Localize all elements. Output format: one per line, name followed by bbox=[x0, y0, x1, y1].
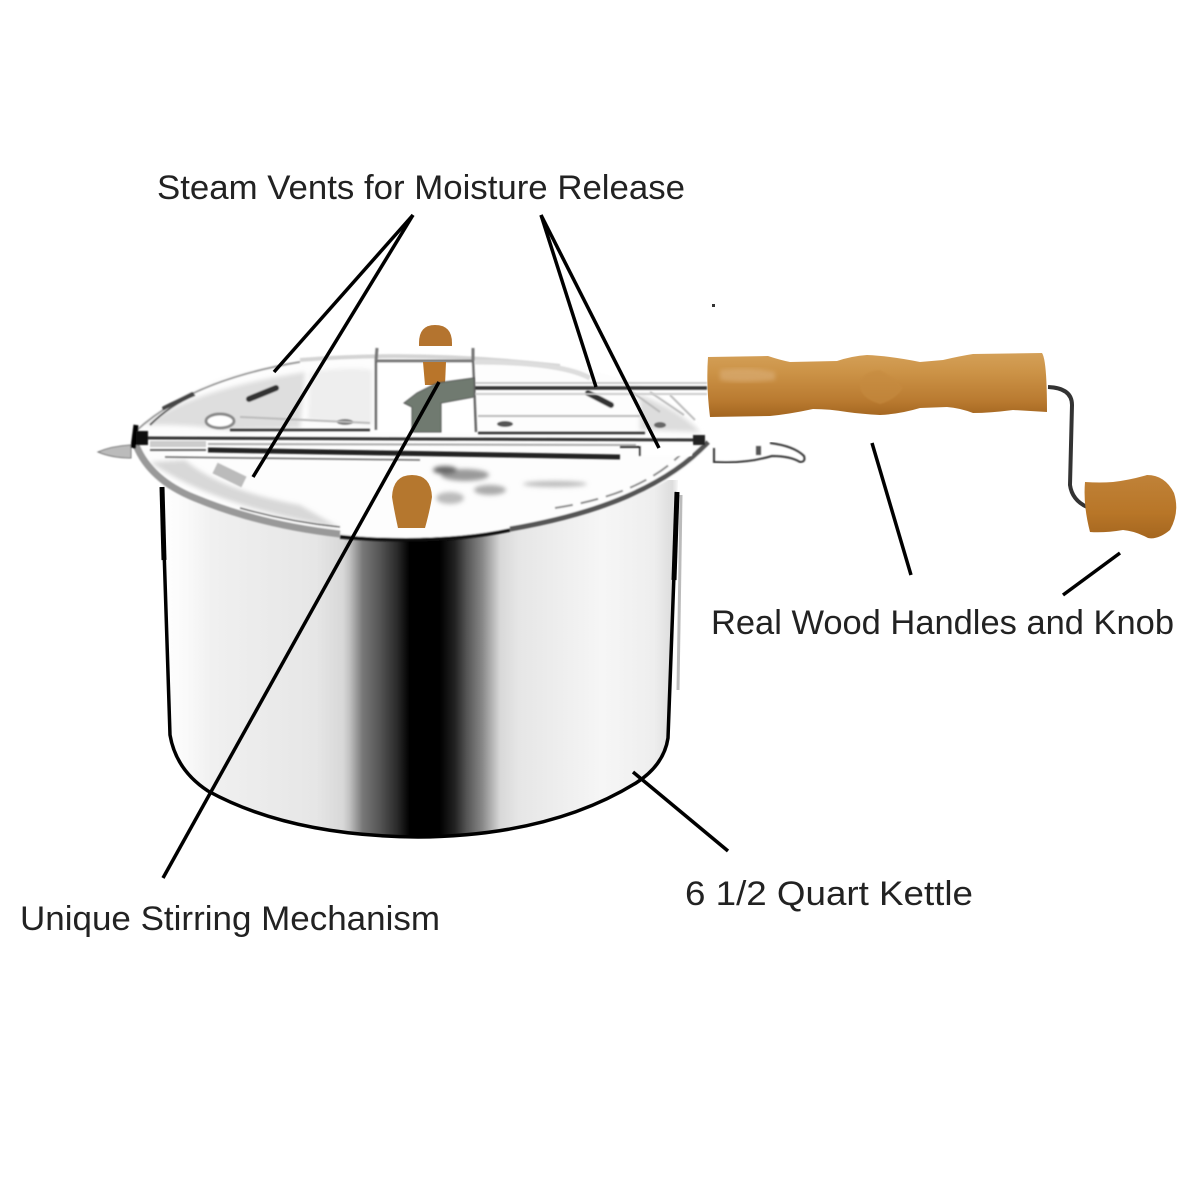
kettle lid bbox=[132, 355, 708, 540]
lid debris shading bbox=[433, 466, 587, 504]
stirring rods bbox=[98, 416, 705, 460]
lid shading bbox=[145, 372, 305, 430]
label: steam vents: Steam Vents for Moisture Release bbox=[157, 169, 685, 207]
kettle body bbox=[161, 480, 681, 837]
label: kettle size: 6 1/2 Quart Kettle bbox=[685, 875, 973, 913]
icon: steam vents bbox=[164, 388, 611, 482]
label: stirring mechanism: Unique Stirring Mechanism bbox=[20, 900, 440, 938]
wooden handle bbox=[707, 353, 1047, 417]
crank bracket bbox=[376, 348, 707, 433]
wooden lid knob back bbox=[419, 325, 452, 385]
crank knob bbox=[1085, 475, 1176, 538]
wooden lid knob front bbox=[392, 475, 432, 528]
crank arm bbox=[1048, 387, 1087, 507]
speck bbox=[712, 304, 715, 307]
lid rim bbox=[136, 445, 340, 534]
gear mechanism bbox=[404, 378, 474, 432]
leader lines bbox=[163, 215, 1120, 878]
clip hook bbox=[714, 443, 804, 462]
label: wood handles: Real Wood Handles and Knob bbox=[711, 604, 1174, 642]
lid rivets bbox=[206, 414, 666, 428]
